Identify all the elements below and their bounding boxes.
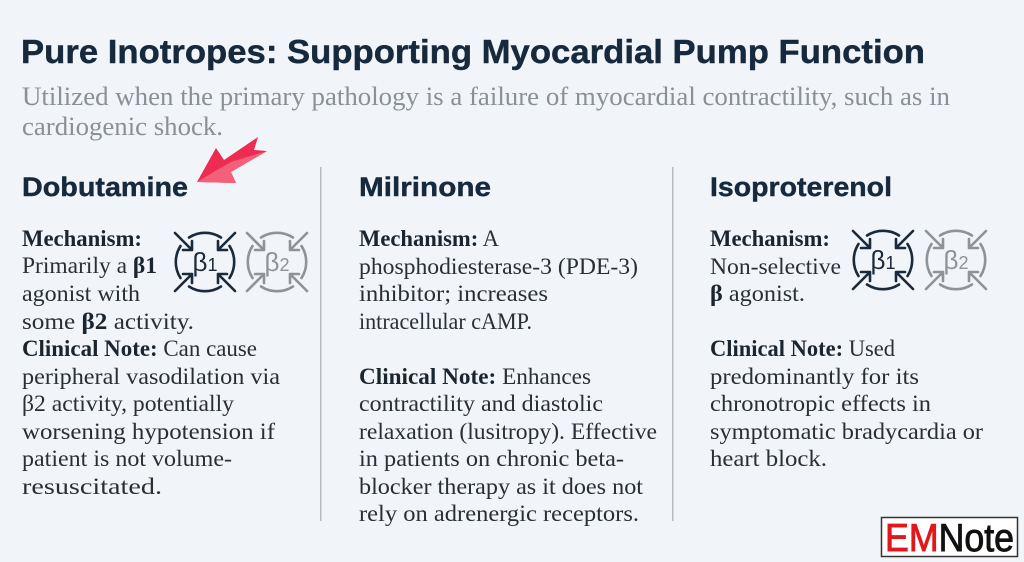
icon: beta-2 receptor: β2 bbox=[944, 245, 968, 275]
panel: Milrinone bbox=[359, 172, 657, 527]
panel: Isoproterenol bbox=[710, 172, 986, 472]
text: Milrinone mechanism bbox=[359, 226, 638, 335]
text: Milrinone clinical note: contractility and diastolic bbox=[359, 391, 603, 417]
text: Milrinone mechanism: phosphodiesterase-3 (PDE-3) bbox=[359, 254, 638, 280]
text: Dobutamine mechanism: Mechanism: bbox=[22, 226, 142, 252]
text: Isoproterenol clinical note bbox=[710, 336, 983, 472]
icon: beta-1 receptor bbox=[853, 231, 913, 289]
text: Dobutamine mechanism: Primarily a β1 bbox=[22, 253, 157, 279]
text: Milrinone clinical note: relaxation (lusitropy). Effective bbox=[359, 419, 657, 445]
panel: Dobutamine bbox=[22, 137, 307, 500]
text: Isoproterenol mechanism: Non-selective bbox=[710, 254, 841, 280]
text: Isoproterenol clinical note: chronotropic effects in bbox=[710, 391, 931, 417]
text: Isoproterenol clinical note: Clinical Note: Used bbox=[710, 336, 895, 362]
text: Isoproterenol clinical note: predominantly for its bbox=[710, 364, 919, 390]
text: Isoproterenol mechanism bbox=[710, 226, 841, 307]
icon: beta-1 receptor: β1 bbox=[871, 245, 895, 275]
title: Pure Inotropes: Supporting Myocardial Pump Function bbox=[21, 33, 925, 70]
text: Dobutamine clinical note: worsening hypotension if bbox=[22, 419, 275, 445]
heading: Isoproterenol: Isoproterenol bbox=[710, 172, 892, 202]
text: Dobutamine clinical note: resuscitated. bbox=[22, 474, 162, 500]
subtitle: Utilized when the primary pathology is a failure of myocardial contractility, such as in bbox=[22, 81, 950, 111]
text: Milrinone mechanism: inhibitor; increases bbox=[359, 281, 548, 307]
text: Milrinone clinical note: blocker therapy as it does not bbox=[359, 474, 643, 500]
logo: EMNote: EMNote bbox=[885, 517, 1014, 560]
text: Dobutamine mechanism: agonist with bbox=[22, 281, 140, 307]
text: Dobutamine clinical note: patient is not volume- bbox=[22, 446, 232, 472]
heading: Milrinone: Milrinone bbox=[359, 172, 491, 202]
text: Dobutamine clinical note: Clinical Note: Can cause bbox=[22, 336, 257, 362]
icon: beta-2 receptor bbox=[247, 233, 307, 291]
text: Milrinone clinical note: Clinical Note: Enhances bbox=[359, 364, 591, 390]
icon: beta-1 receptor: β1 bbox=[193, 247, 217, 277]
icon: beta-1 receptor bbox=[175, 233, 235, 291]
text: Milrinone clinical note: in patients on chronic beta- bbox=[359, 446, 624, 472]
heading: Dobutamine: Dobutamine bbox=[22, 172, 188, 202]
column divider left bbox=[320, 167, 322, 521]
text: Isoproterenol mechanism: Mechanism: bbox=[710, 226, 830, 252]
text: Isoproterenol clinical note: symptomatic bradycardia or bbox=[710, 419, 983, 445]
text: Isoproterenol clinical note: heart block. bbox=[710, 446, 827, 472]
text: Milrinone clinical note: rely on adrenergic receptors. bbox=[359, 501, 639, 527]
icon: beta-2 receptor: β2 bbox=[265, 247, 289, 277]
text: Dobutamine clinical note: peripheral vasodilation via bbox=[22, 364, 281, 390]
text: Dobutamine mechanism: some β2 activity. bbox=[22, 309, 194, 335]
column divider right bbox=[672, 167, 674, 521]
icon: red arrow bbox=[197, 137, 267, 183]
text: Milrinone mechanism: intracellular cAMP. bbox=[359, 309, 532, 335]
text: Milrinone clinical note bbox=[359, 364, 657, 527]
subtitle bbox=[22, 81, 950, 141]
text: Dobutamine clinical note: β2 activity, potentially bbox=[22, 391, 234, 417]
text: Milrinone mechanism: Mechanism: A bbox=[359, 226, 499, 252]
text: Isoproterenol mechanism: β agonist. bbox=[710, 281, 805, 307]
text: Dobutamine mechanism bbox=[22, 226, 194, 335]
icon: beta-2 receptor bbox=[926, 231, 986, 289]
text: Dobutamine clinical note bbox=[22, 336, 281, 500]
subtitle: cardiogenic shock. bbox=[22, 111, 223, 141]
